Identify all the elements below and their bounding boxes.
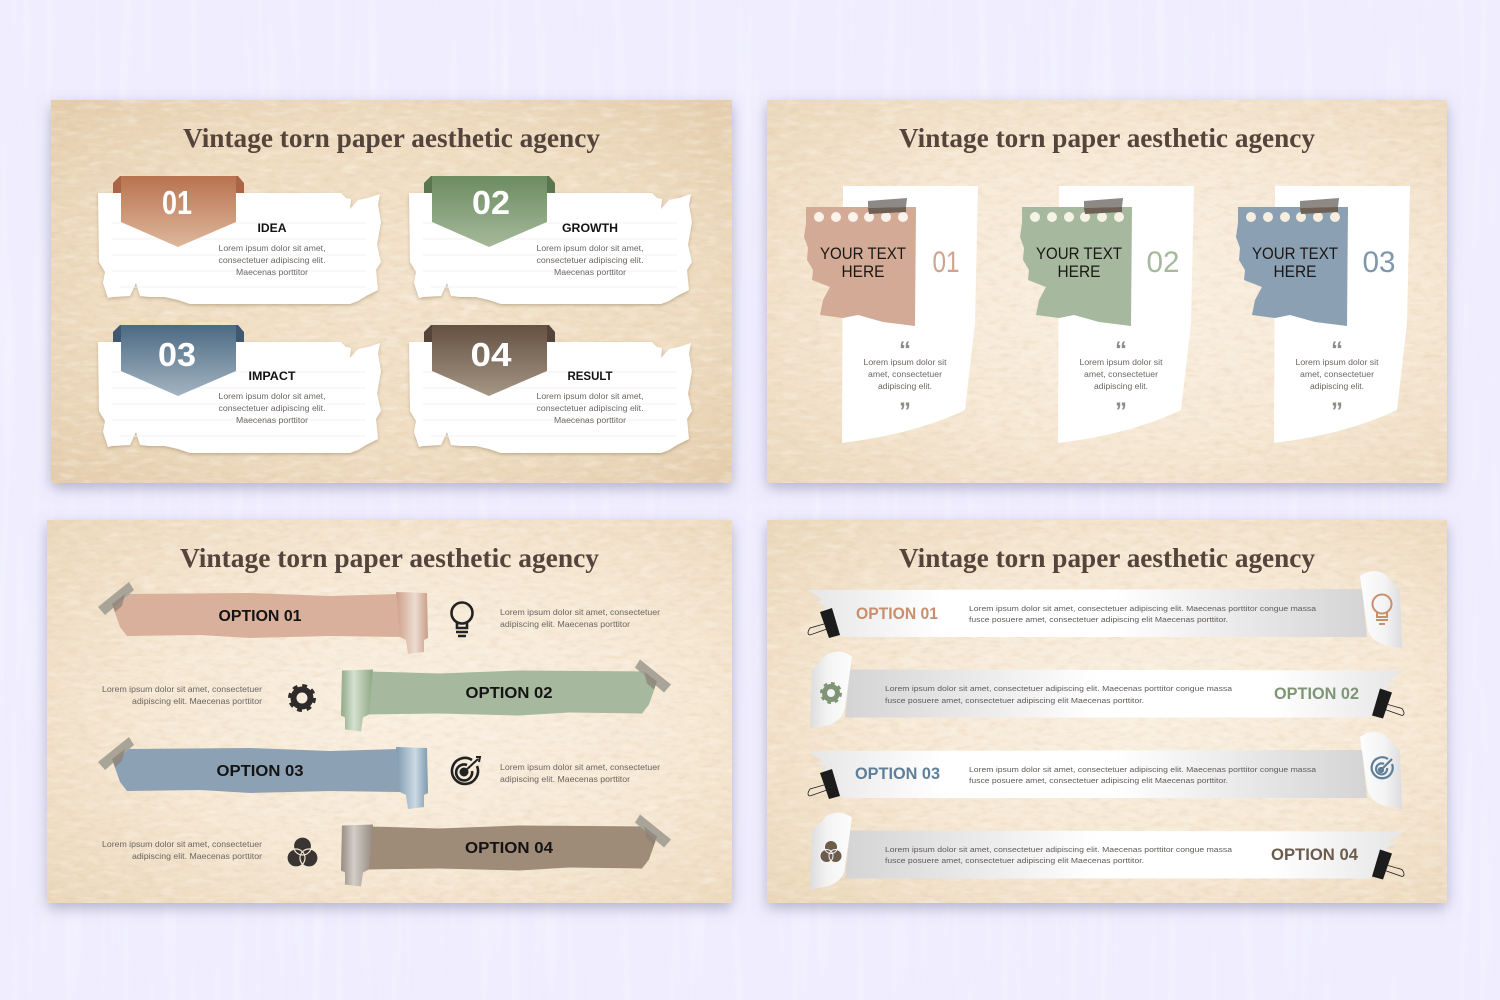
- card 04 result: 04: [470, 336, 512, 373]
- ribbon option 04: OPTION 04: [1271, 846, 1359, 864]
- panel: torn strips: [47, 520, 732, 903]
- icon: light bulb: [452, 602, 472, 636]
- ribbon option 03: [808, 732, 1402, 809]
- card 01 idea: Maecenas porttitor: [236, 268, 308, 277]
- note 03: ”: [1331, 398, 1343, 425]
- card 03 impact: Maecenas porttitor: [236, 416, 308, 425]
- panel: taped notes: [767, 100, 1447, 483]
- ribbon option 01: OPTION 01: [856, 605, 938, 623]
- ribbon option 01: Lorem ipsum dolor sit amet, consectetuer adipiscing elit. Maecenas porttitor congue massa: [969, 604, 1317, 613]
- note 03: “: [1331, 337, 1343, 364]
- card 02 growth: Lorem ipsum dolor sit amet,: [536, 244, 644, 253]
- card 02 growth: consectetuer adipiscing elit.: [536, 256, 644, 265]
- card 03 impact: consectetuer adipiscing elit.: [218, 404, 326, 413]
- note 03: 03: [1362, 246, 1396, 279]
- title: Vintage torn paper aesthetic agency: [180, 543, 600, 573]
- card 04 result: Lorem ipsum dolor sit amet,: [536, 392, 644, 401]
- note 01: [804, 186, 978, 443]
- ribbon option 01: fusce posuere amet, consectetuer adipiscing elit Maecenas porttitor.: [969, 615, 1228, 624]
- ribbon option 02: Lorem ipsum dolor sit amet, consectetuer adipiscing elit. Maecenas porttitor congue massa: [885, 684, 1233, 693]
- icon: gear: [822, 684, 840, 702]
- note 03: Lorem ipsum dolor sit: [1296, 358, 1379, 367]
- card 04 result: Maecenas porttitor: [554, 416, 626, 425]
- panel: torn note cards: [51, 100, 732, 483]
- strip option 01: [98, 582, 428, 654]
- card 03 impact: 03: [158, 336, 196, 373]
- card 04 result: RESULT: [568, 371, 612, 383]
- card 01 idea: IDEA: [258, 223, 286, 235]
- icon: light bulb: [1372, 594, 1392, 624]
- note 01: HERE: [842, 263, 884, 281]
- text: option 04 description: adipiscing elit. Maecenas porttitor: [132, 852, 262, 861]
- ribbon option 03: OPTION 03: [855, 765, 940, 783]
- card 01 idea: 01: [162, 184, 192, 221]
- text: option 02 description: [102, 685, 262, 706]
- note 02: 02: [1146, 246, 1180, 279]
- text: option 01 description: adipiscing elit. Maecenas porttitor: [500, 620, 630, 629]
- card 02 growth: 02: [472, 184, 510, 221]
- text: option 04 description: Lorem ipsum dolor sit amet, consectetuer: [102, 840, 262, 849]
- text: option 03 description: adipiscing elit. Maecenas porttitor: [500, 775, 630, 784]
- note 01: 01: [932, 246, 960, 279]
- note 02: [1020, 186, 1194, 443]
- card 03 impact: [98, 325, 381, 453]
- ribbon option 02: OPTION 02: [1274, 685, 1359, 703]
- note 01: YOUR TEXT: [820, 245, 906, 263]
- card 02 growth: GROWTH: [562, 223, 618, 235]
- note 02: adipiscing elit.: [1094, 382, 1148, 391]
- card 04 result: consectetuer adipiscing elit.: [536, 404, 644, 413]
- note 01: amet, consectetuer: [868, 370, 942, 379]
- text: option 04 description: [102, 840, 262, 861]
- title: Vintage torn paper aesthetic agency: [899, 123, 1316, 153]
- note 02: Lorem ipsum dolor sit: [1080, 358, 1163, 367]
- note 03: adipiscing elit.: [1310, 382, 1364, 391]
- strip option 02: [341, 660, 671, 732]
- note 01: “: [899, 337, 911, 364]
- icon: gear: [290, 686, 314, 710]
- note 01: adipiscing elit.: [878, 382, 932, 391]
- text: option 02 description: adipiscing elit. Maecenas porttitor: [132, 697, 262, 706]
- note 03: [1236, 186, 1410, 443]
- card 01 idea: consectetuer adipiscing elit.: [218, 256, 326, 265]
- text: option 02 description: Lorem ipsum dolor sit amet, consectetuer: [102, 685, 262, 694]
- note 02: YOUR TEXT: [1036, 245, 1122, 263]
- card 03 impact: Lorem ipsum dolor sit amet,: [218, 392, 326, 401]
- note 02: HERE: [1058, 263, 1100, 281]
- text: option 01 description: Lorem ipsum dolor sit amet, consectetuer: [500, 608, 660, 617]
- panel: clipped ribbons: [767, 520, 1447, 903]
- note 01: ”: [899, 398, 911, 425]
- card 02 growth: [409, 176, 692, 304]
- ribbon option 04: fusce posuere amet, consectetuer adipiscing elit Maecenas porttitor.: [885, 856, 1144, 865]
- icon: three circles: [287, 837, 318, 867]
- text: option 03 description: Lorem ipsum dolor sit amet, consectetuer: [500, 763, 660, 772]
- strip option 01: OPTION 01: [218, 608, 302, 625]
- ribbon option 03: Lorem ipsum dolor sit amet, consectetuer adipiscing elit. Maecenas porttitor congue massa: [969, 765, 1317, 774]
- card 01 idea: Lorem ipsum dolor sit amet,: [218, 244, 326, 253]
- strip option 04: [341, 814, 671, 886]
- ribbon option 01: [808, 571, 1402, 648]
- card 03 impact: IMPACT: [248, 371, 296, 383]
- strip option 03: OPTION 03: [216, 763, 304, 780]
- card 04 result: [409, 325, 692, 453]
- ribbon option 04: Lorem ipsum dolor sit amet, consectetuer adipiscing elit. Maecenas porttitor congue massa: [885, 845, 1233, 854]
- card 02 growth: Maecenas porttitor: [554, 268, 626, 277]
- note 01: Lorem ipsum dolor sit: [864, 358, 947, 367]
- title: Vintage torn paper aesthetic agency: [899, 543, 1316, 573]
- strip option 02: OPTION 02: [466, 685, 552, 702]
- note 02: “: [1115, 337, 1127, 364]
- icon: target: [1372, 757, 1393, 778]
- text: option 03 description: [500, 763, 660, 784]
- ribbon option 04: [810, 812, 1404, 890]
- card 01 idea: [98, 176, 381, 304]
- icon: target: [452, 757, 480, 784]
- note 03: HERE: [1274, 263, 1316, 281]
- strip option 03: [98, 737, 428, 809]
- note 02: ”: [1115, 398, 1127, 425]
- ribbon option 03: fusce posuere amet, consectetuer adipiscing elit Maecenas porttitor.: [969, 776, 1228, 785]
- note 03: YOUR TEXT: [1252, 245, 1338, 263]
- text: option 01 description: [500, 608, 660, 629]
- note 03: amet, consectetuer: [1300, 370, 1374, 379]
- ribbon option 02: [810, 651, 1404, 728]
- title: Vintage torn paper aesthetic agency: [183, 123, 601, 153]
- note 02: amet, consectetuer: [1084, 370, 1158, 379]
- ribbon option 02: fusce posuere amet, consectetuer adipiscing elit Maecenas porttitor.: [885, 696, 1144, 705]
- strip option 04: OPTION 04: [465, 840, 553, 857]
- icon: three circles: [820, 840, 842, 862]
